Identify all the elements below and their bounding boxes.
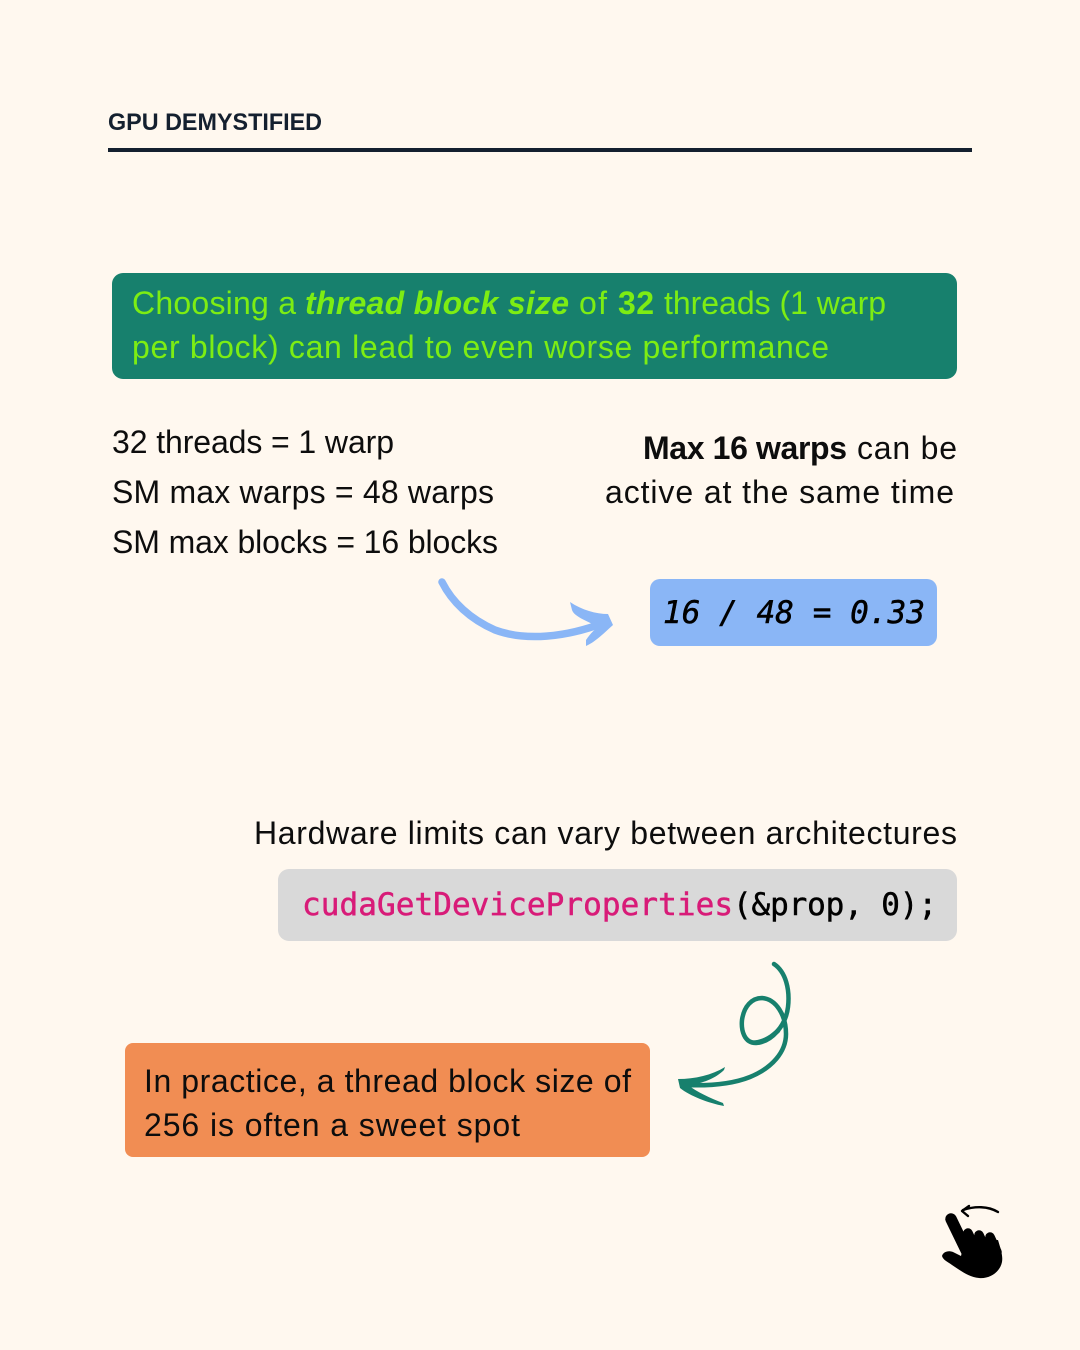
text block: max active warps: can be: [857, 430, 957, 466]
code block: cudaGetDeviceProperties: [302, 887, 733, 923]
text: hardware limits: Hardware limits can vary between architectures: [254, 815, 957, 851]
text block: max active warps: Max 16 warps: [643, 430, 847, 466]
icon: swipe hand: [942, 1206, 1002, 1278]
callout: thread block size: Choosing a: [132, 285, 296, 321]
text block: limits: SM max blocks = 16 blocks: [112, 524, 498, 560]
arrow: curly: [678, 964, 788, 1106]
callout: thread block size: per block) can lead to even worse performance: [132, 329, 829, 365]
text block: max active warps: [605, 430, 957, 510]
callout: thread block size: threads (1 warp: [664, 285, 886, 321]
callout: sweet spot: 256 is often a sweet spot: [144, 1107, 520, 1143]
code block: [278, 869, 957, 941]
callout: thread block size: [112, 273, 957, 379]
callout: thread block size: of: [579, 285, 607, 321]
text block: limits: 32 threads = 1 warp: [112, 424, 394, 460]
header: GPU DEMYSTIFIED: [108, 109, 322, 136]
callout: thread block size: 32: [618, 285, 654, 321]
code block: (&prop, 0);: [733, 887, 937, 923]
text block: max active warps: active at the same time: [605, 474, 954, 510]
text block: limits: SM max warps = 48 warps: [112, 474, 494, 510]
formula: ratio: [650, 579, 937, 646]
arrow: to ratio: [442, 582, 613, 646]
callout: sweet spot: In practice, a thread block size of: [144, 1063, 631, 1099]
callout: thread block size: thread block size: [305, 285, 569, 321]
header: [108, 109, 972, 152]
callout: sweet spot: [125, 1043, 650, 1157]
text block: limits: [112, 424, 498, 560]
formula: ratio: 16 / 48 = 0.33: [663, 595, 925, 631]
